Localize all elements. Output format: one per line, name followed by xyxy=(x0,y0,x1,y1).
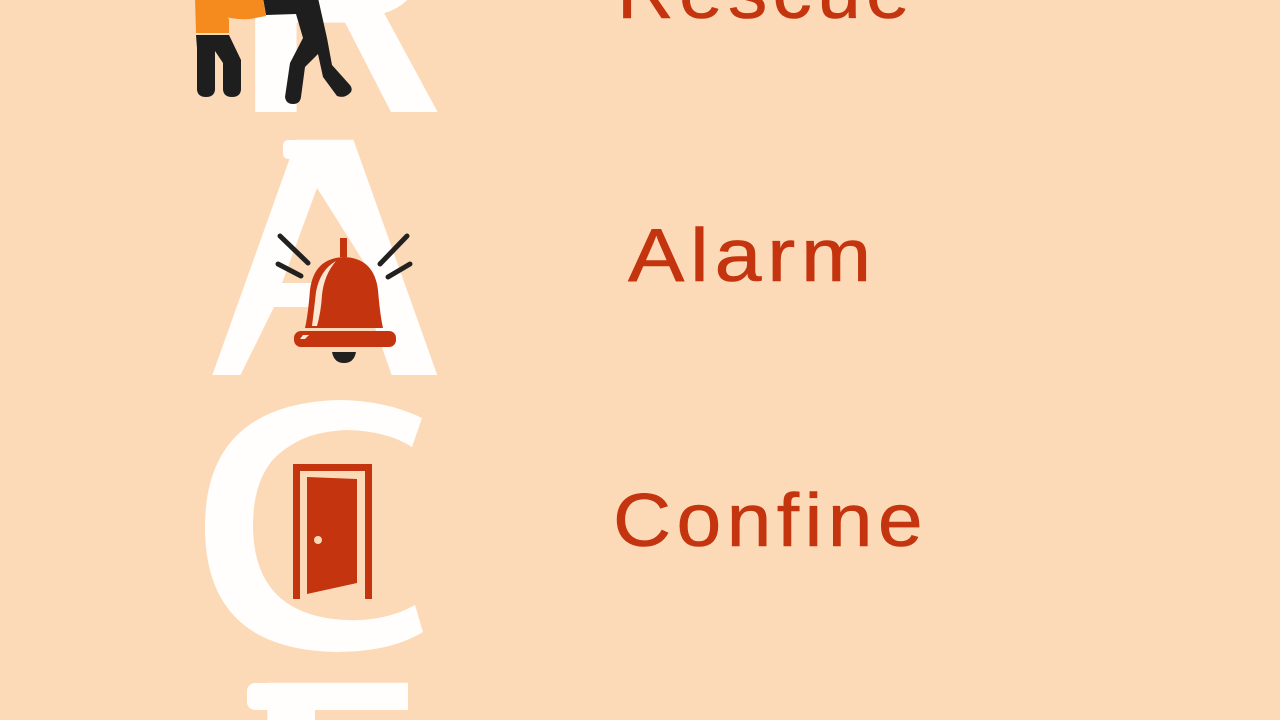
rescued person, orange torso xyxy=(195,0,229,33)
bell rim xyxy=(294,331,396,347)
icon: open door xyxy=(293,464,372,599)
letter C: C xyxy=(198,339,423,713)
bell highlight xyxy=(312,261,336,326)
bell clapper xyxy=(332,352,356,363)
door knob xyxy=(314,536,322,544)
rescued person, orange arm xyxy=(208,0,266,19)
bell rim highlight xyxy=(300,335,309,339)
door frame xyxy=(293,464,372,599)
icon: rescue figures xyxy=(195,0,352,104)
label: Confine: Confine xyxy=(613,478,928,562)
bell stem xyxy=(340,238,347,257)
bell body xyxy=(305,257,383,328)
door leaf xyxy=(307,477,357,594)
bell sound lines xyxy=(278,236,410,277)
letter A: A xyxy=(204,65,446,448)
label: Alarm: Alarm xyxy=(628,213,877,297)
rescued person, legs xyxy=(196,35,241,97)
icon: alarm bell xyxy=(278,236,410,363)
rescuer, torso and legs xyxy=(263,0,352,104)
